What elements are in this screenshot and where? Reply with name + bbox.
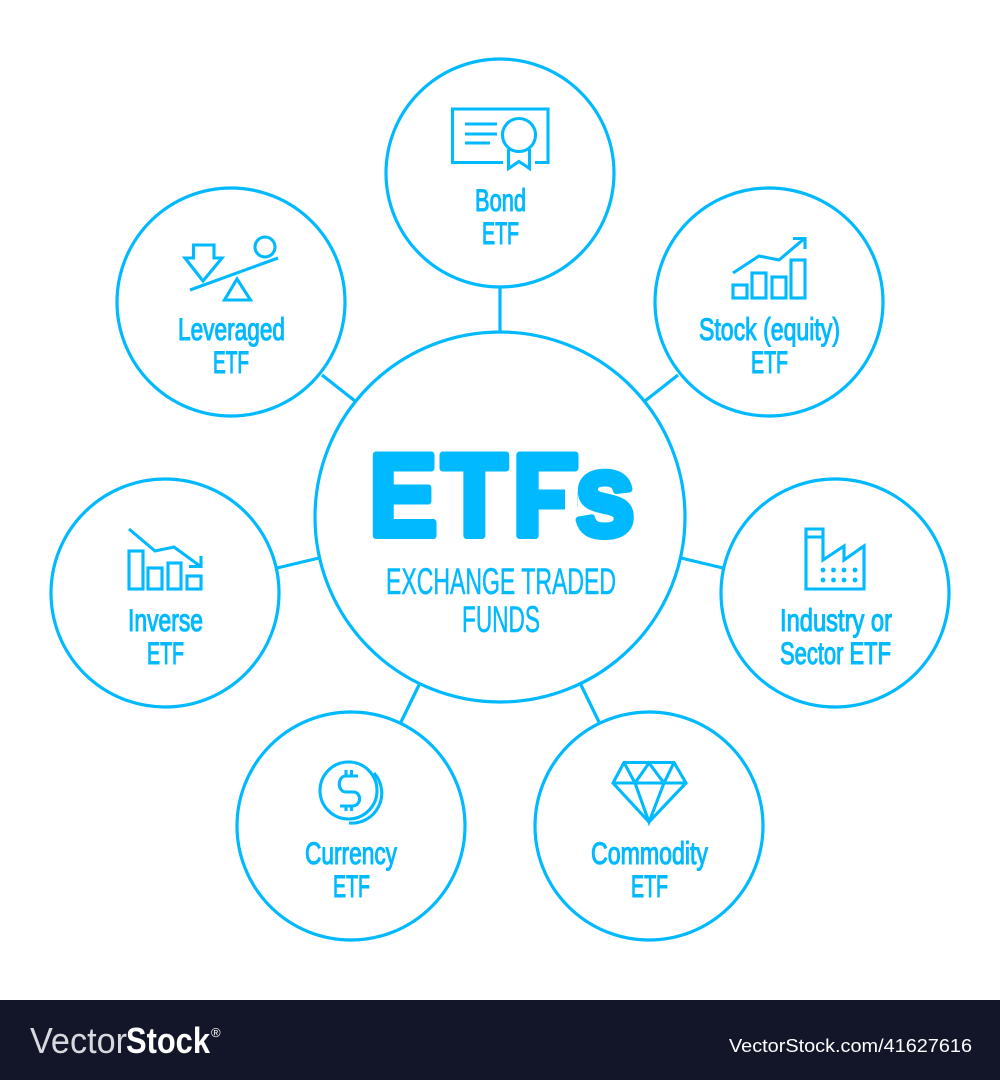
title: ETFs: F [512,430,579,560]
label: Leveraged ETF [178,311,285,380]
label: Industry or Sector ETF: Sector ETF [780,635,891,671]
title: ETFs [369,430,635,560]
label: Leveraged ETF: ETF [213,344,249,380]
label: Commodity ETF: ETF [631,868,668,904]
label: Currency ETF: Currency [305,835,397,871]
icon: falling bar chart [129,529,201,589]
title: ETFs: E [369,430,438,560]
panel: Currency ETF [237,712,465,940]
label: Industry or Sector ETF [780,602,892,671]
label: Inverse ETF: ETF [147,635,184,671]
label: Currency ETF: ETF [333,868,370,904]
panel: Bond ETF [386,59,614,287]
label: Leveraged ETF: Leveraged [178,311,285,347]
central hub: ETFs [315,332,685,702]
icon: seesaw with arrow and ball [185,237,278,300]
connectors between hub and satellite circles [277,288,723,722]
panel: Inverse ETF [51,479,279,707]
subtitle: exchange traded funds: FUNDS [462,598,540,640]
footer bar [0,1000,1000,1080]
logo: VectorStock: ® [211,1025,221,1040]
icon: rising bar chart [733,238,805,298]
panel: Industry or Sector ETF [721,479,949,707]
subtitle: exchange traded funds: EXCHANGE TRADED [386,560,616,602]
title: ETFs: T [442,430,507,560]
logo: VectorStock: Vector [30,1020,127,1061]
icon: dollar coin [320,762,382,823]
label: Inverse ETF: Inverse [128,602,203,638]
label: Stock (equity) ETF: Stock (equity) [699,311,840,347]
logo: VectorStock [30,1020,221,1061]
label: Inverse ETF [128,602,203,671]
icon: factory [806,529,864,589]
icon: diamond [613,762,686,822]
label: Bond ETF: ETF [482,215,519,251]
label: Currency ETF [305,835,397,904]
panel: Leveraged ETF [117,188,345,416]
label: Commodity ETF [591,835,708,904]
label: Bond ETF: Bond [475,182,526,218]
icon: bond certificate [452,109,548,168]
label: Bond ETF [475,182,526,251]
label: Commodity ETF: Commodity [591,835,708,871]
subtitle: exchange traded funds [386,560,616,640]
logo: VectorStock: Stock [126,1020,211,1061]
label: Industry or Sector ETF: Industry or [780,602,892,638]
label: Stock (equity) ETF: ETF [751,344,788,380]
image id: VectorStock.com/41627616 [729,1035,972,1056]
label: Stock (equity) ETF [699,311,840,380]
title: ETFs: s [575,430,635,560]
panel: Commodity ETF [535,712,763,940]
panel: Stock (equity) ETF [655,188,883,416]
